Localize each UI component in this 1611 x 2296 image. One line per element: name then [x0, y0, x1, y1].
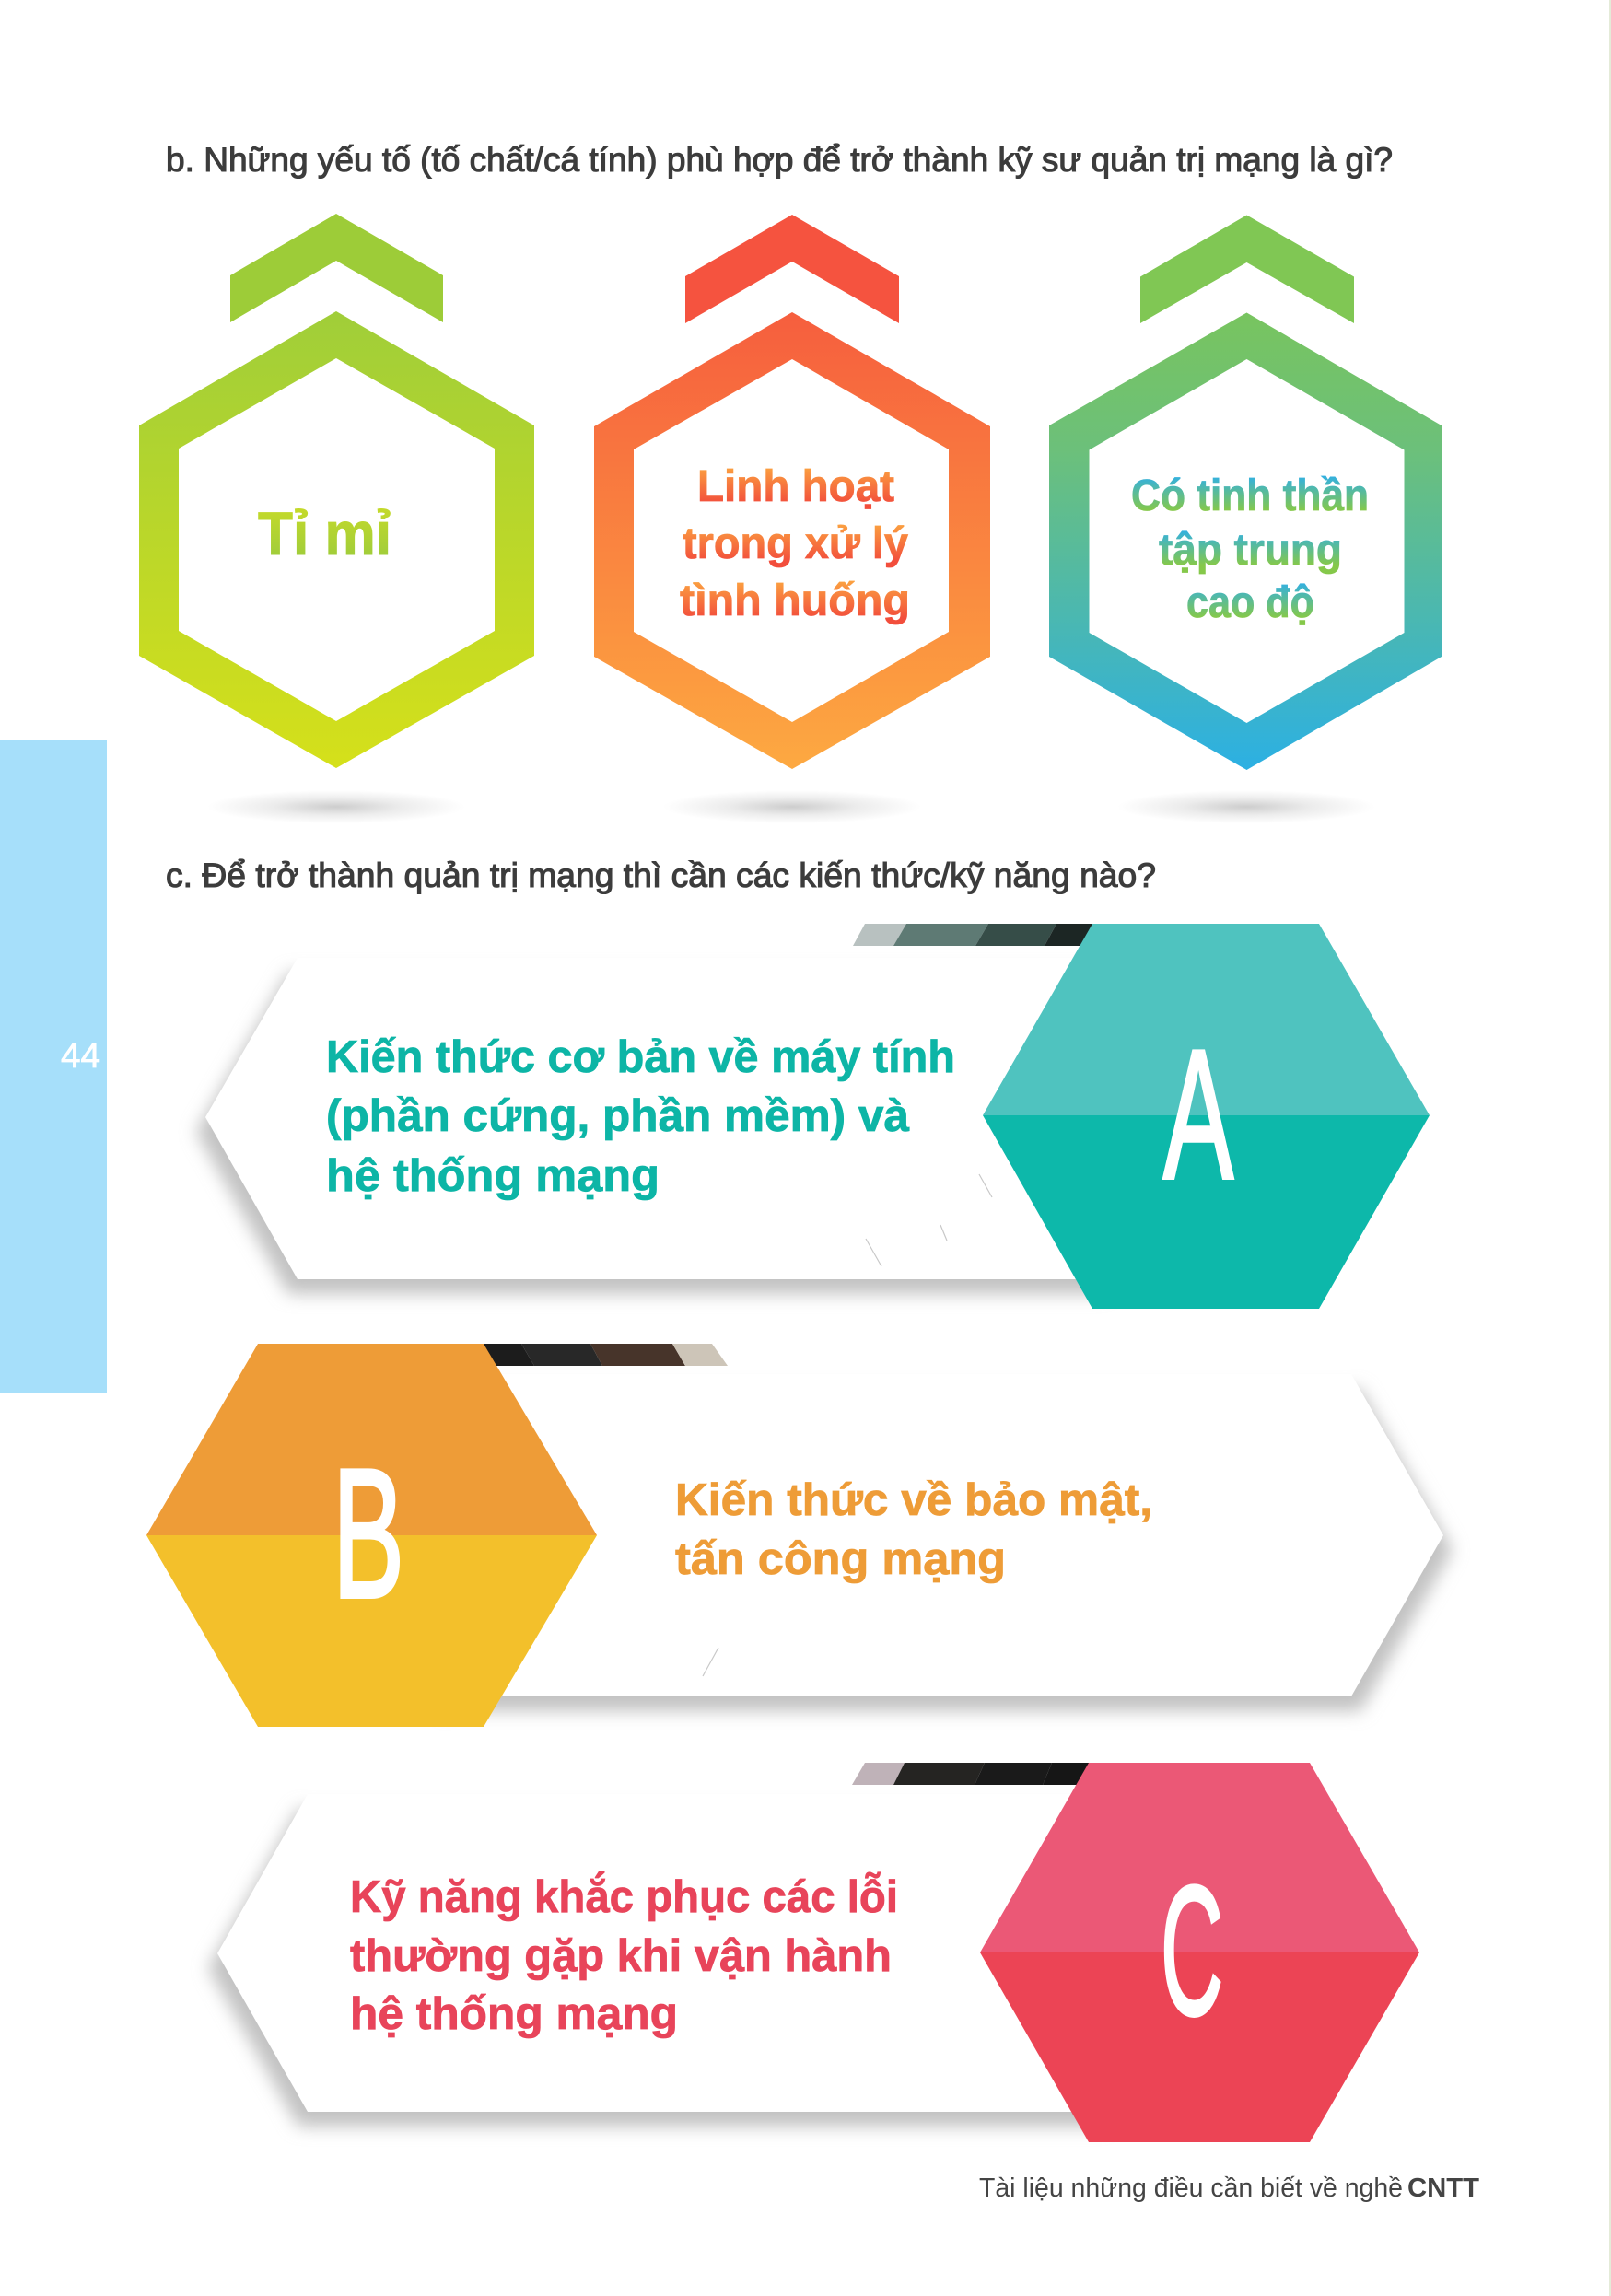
heading c: c. Để trở thành quản trị mạng thì cần các kiến thức/kỹ năng nào?	[166, 857, 1156, 894]
card shadow	[442, 1389, 1453, 1711]
card text: Kiến thức cơ bản về máy tính	[326, 1032, 955, 1082]
card text: (phần cứng, phần mềm) và	[326, 1091, 910, 1141]
card text: hệ thống mạng	[350, 1989, 678, 2039]
hexagon label	[680, 462, 910, 625]
ground shadow	[207, 790, 465, 823]
card text	[675, 1475, 1152, 1584]
hexagon A	[983, 924, 1430, 1309]
colour strip	[479, 1344, 728, 1366]
hexagon label: tình huống	[680, 577, 910, 625]
card scratch marks	[866, 1174, 992, 1266]
hexagon C: C	[1161, 1848, 1223, 2054]
chevron red	[685, 215, 899, 323]
hexagon B	[146, 1344, 597, 1727]
card text: tấn công mạng	[675, 1534, 1006, 1584]
panel: hexagon Tỉ mỉ	[139, 214, 534, 823]
card shadow	[196, 973, 1105, 1294]
heading b: b. Những yếu tố (tố chất/cá tính) phù hợp để trở thành kỹ sư quản trị mạng là gì?	[166, 141, 1393, 179]
card text	[326, 1032, 955, 1201]
card body	[217, 1794, 1115, 2112]
card shadow	[208, 1809, 1105, 2127]
panel: hexagon Linh hoạt	[594, 215, 990, 823]
hexagon label: tập trung	[1159, 526, 1342, 575]
card text	[350, 1871, 898, 2039]
ground shadow	[663, 790, 921, 823]
hexagon B: B	[333, 1431, 404, 1637]
panel: card B	[146, 1344, 1453, 1727]
card body	[433, 1374, 1443, 1696]
card body	[205, 958, 1115, 1279]
hexagon label	[1131, 472, 1369, 627]
card text: Kỹ năng khắc phục các lỗi	[350, 1871, 898, 1922]
colour strip	[853, 924, 1096, 946]
footer note: CNTT	[1407, 2174, 1479, 2203]
hexagon label: trong xử lý	[683, 519, 908, 568]
hexagon label: Tỉ mỉ	[258, 499, 391, 567]
side tab with page number: 44	[61, 1037, 100, 1076]
footer note: Tài liệu những điều cần biết về nghề	[979, 2174, 1403, 2203]
hexagon C	[980, 1763, 1419, 2142]
ground shadow	[1117, 790, 1375, 823]
hexagon label: Linh hoạt	[697, 462, 894, 511]
panel: hexagon Có tinh thần	[1049, 216, 1442, 823]
side tab with page number	[0, 740, 107, 1393]
hexagon ring green	[139, 311, 534, 768]
chevron green	[1140, 216, 1354, 323]
hexagon ring orange	[594, 312, 990, 769]
hexagon A: A	[1163, 1012, 1233, 1218]
card text: hệ thống mạng	[326, 1151, 660, 1201]
hexagon label: cao độ	[1186, 578, 1314, 627]
card text: thường gặp khi vận hành	[350, 1931, 892, 1981]
panel: card C	[208, 1763, 1419, 2142]
panel: card A	[196, 924, 1430, 1309]
hexagon ring green-blue	[1049, 313, 1442, 770]
colour strip	[852, 1763, 1092, 1785]
chevron green	[230, 214, 443, 322]
card scratch mark	[703, 1648, 718, 1676]
card text: Kiến thức về bảo mật,	[675, 1475, 1152, 1525]
right page edge	[1609, 0, 1611, 2296]
hexagon label: Có tinh thần	[1131, 472, 1369, 520]
